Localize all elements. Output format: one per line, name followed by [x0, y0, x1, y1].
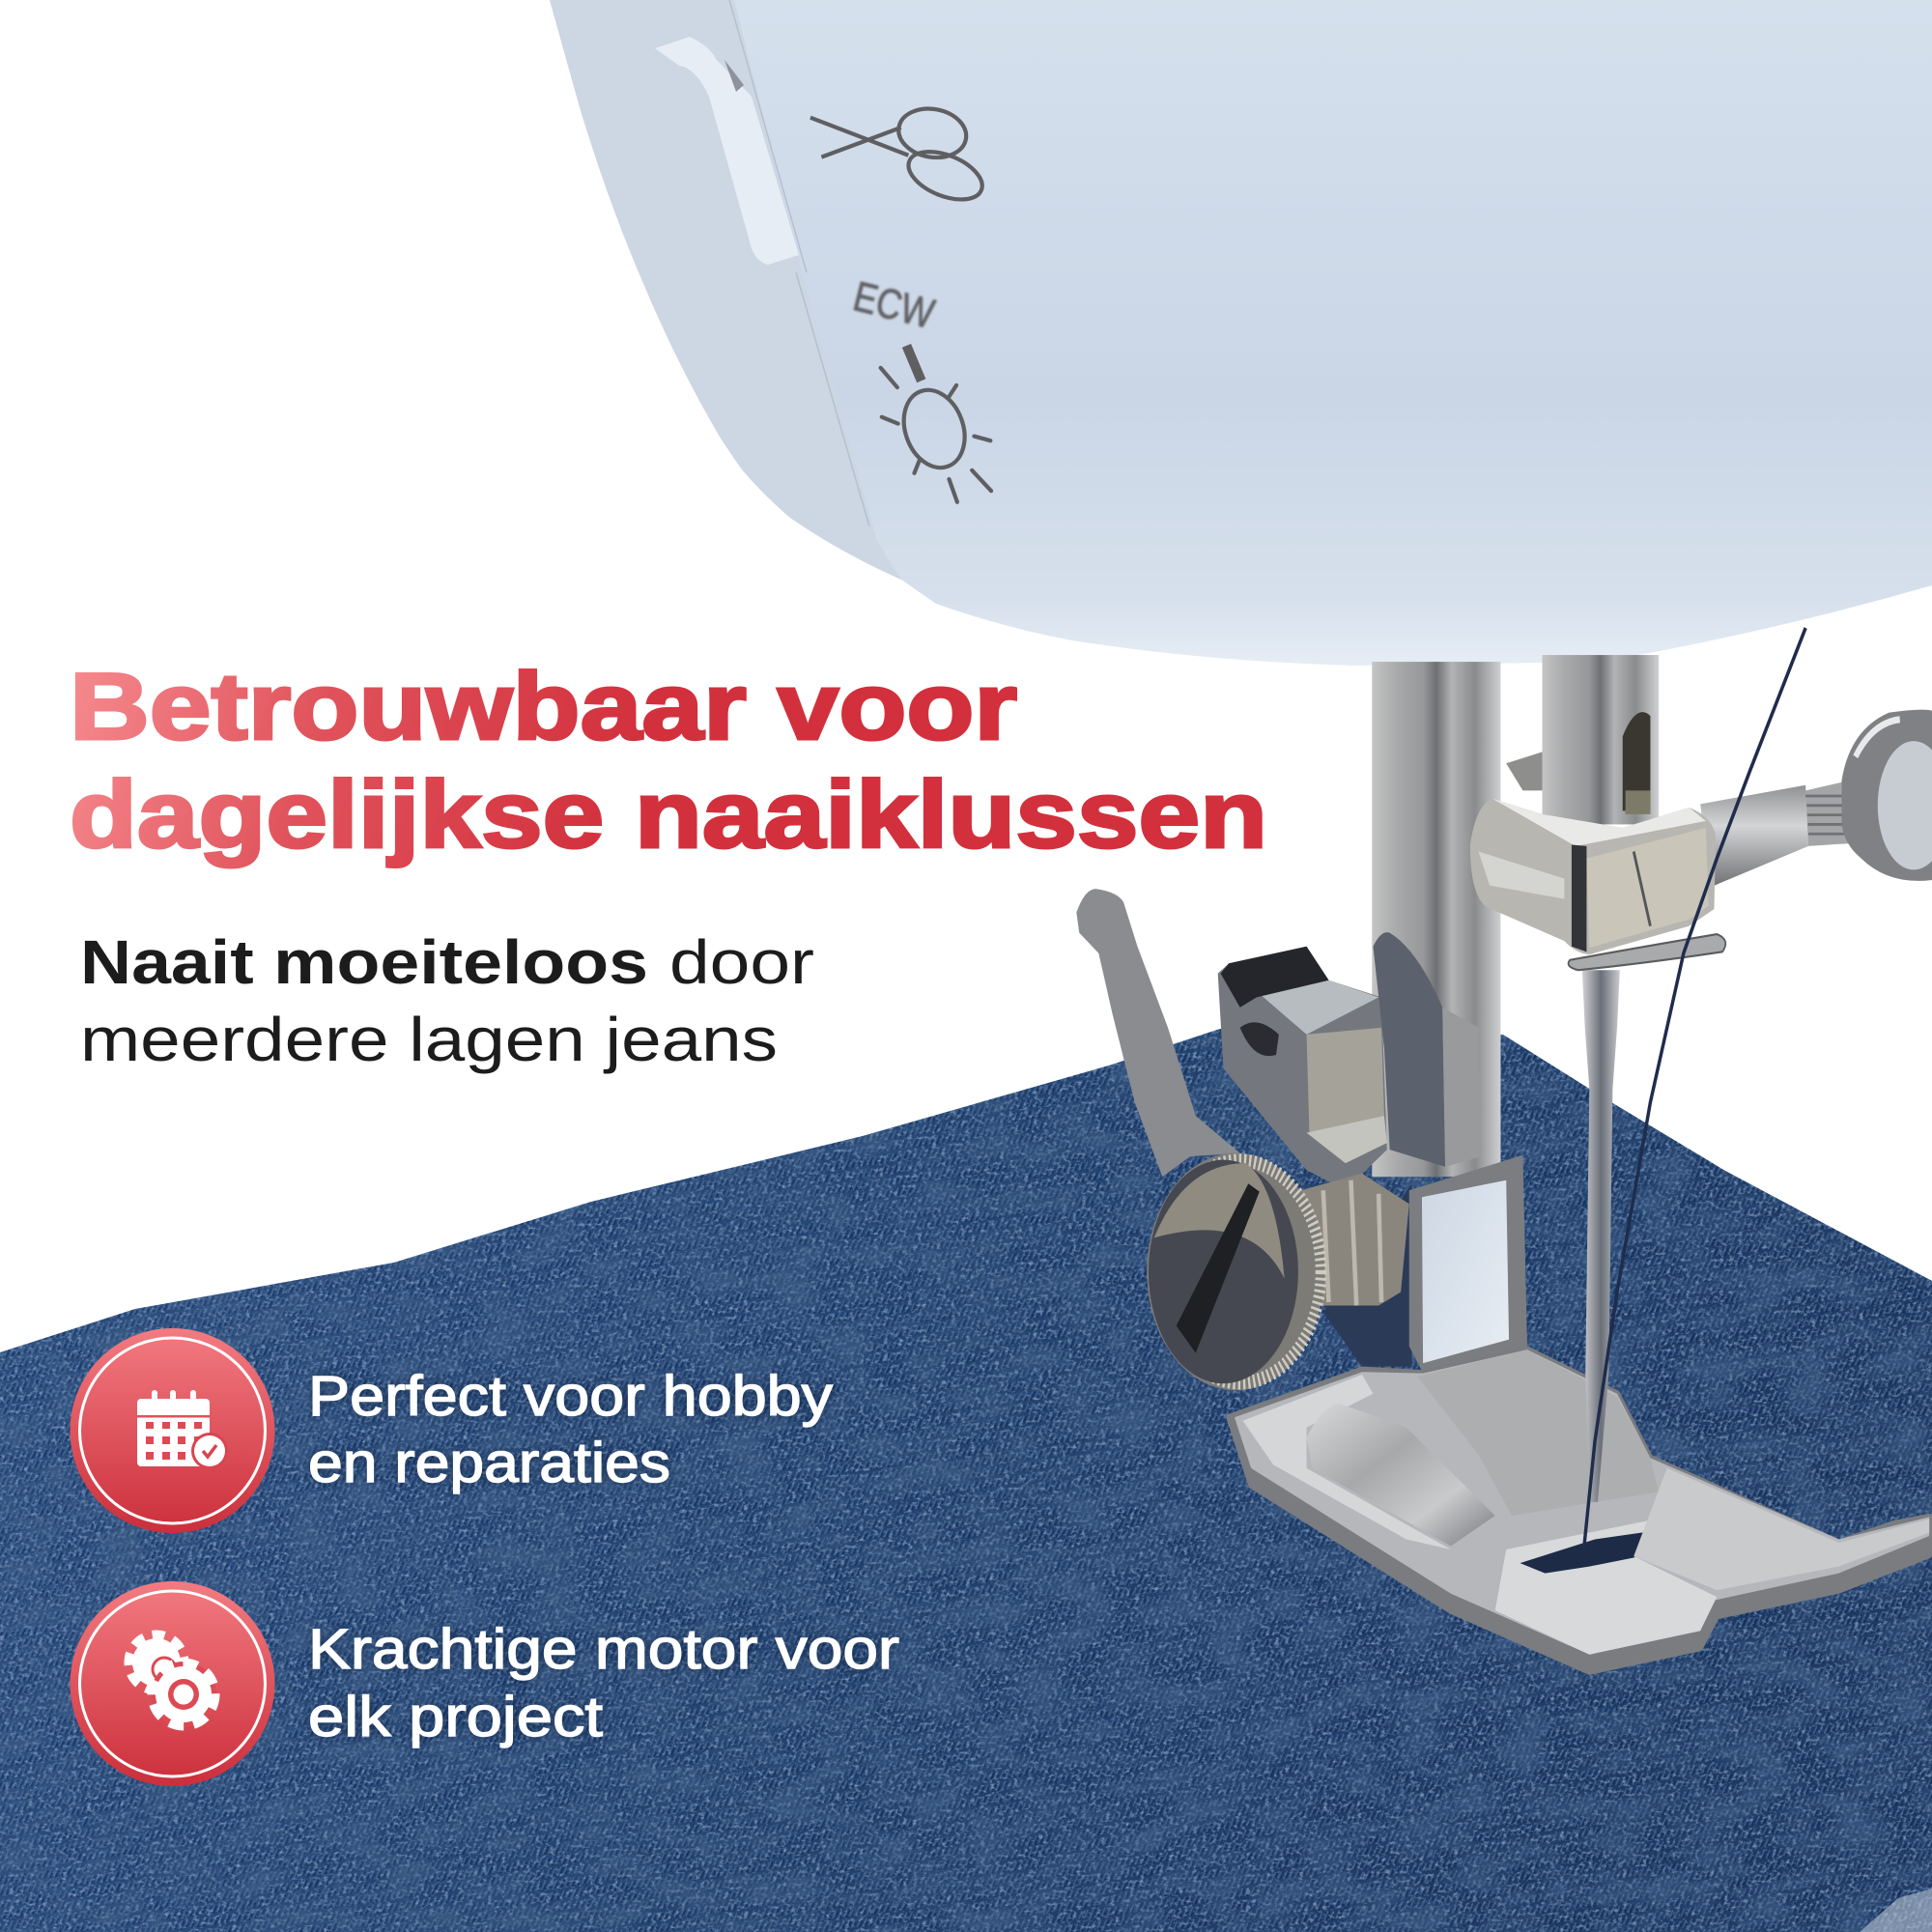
subheading: meerdere lagen jeans [80, 1005, 778, 1074]
needle [1582, 970, 1620, 1502]
heading: Betrouwbaar voor [70, 653, 1017, 759]
presser foot plate [1229, 1350, 1929, 1671]
lower shank with white plate [1323, 1155, 1527, 1374]
feature: powerful motor [70, 1581, 899, 1786]
set screw [1147, 1153, 1409, 1390]
presser lever [1076, 889, 1240, 1177]
feature: hobby and repairs [70, 1328, 833, 1533]
icon: light symbol [881, 346, 991, 502]
badge with gears icon [70, 1581, 274, 1786]
feature text: en reparaties [308, 1432, 670, 1494]
feature text [308, 1618, 899, 1748]
presser block [1218, 947, 1387, 1190]
sewing machine body [550, 0, 1932, 666]
left body panel [550, 0, 901, 580]
heading: dagelijkse naaiklussen [70, 761, 1267, 867]
presser foot and needle assembly [1076, 628, 1932, 1671]
feature text: Perfect voor hobby [308, 1365, 833, 1428]
needle bar [1506, 655, 1659, 824]
feature text: elk project [308, 1686, 603, 1748]
needle clamp [1470, 799, 1716, 954]
panel seam lines [729, 0, 869, 526]
subheading [80, 927, 814, 1074]
thread guide [1569, 934, 1725, 970]
white switch button [655, 37, 799, 265]
machine label ECW: ECW [849, 272, 939, 338]
thumb screw [1700, 710, 1932, 887]
subheading: door [669, 927, 814, 997]
icon: scissors [810, 103, 989, 209]
heading [70, 653, 1267, 867]
feature text: Krachtige motor voor [308, 1618, 899, 1681]
thread [1584, 628, 1805, 1549]
presser bar [1372, 662, 1500, 1177]
denim fabric [0, 1014, 1932, 1932]
feature text [308, 1365, 833, 1494]
blade guide [1373, 932, 1445, 1167]
badge with calendar icon [70, 1328, 274, 1533]
subheading: Naait moeiteloos [80, 927, 648, 997]
